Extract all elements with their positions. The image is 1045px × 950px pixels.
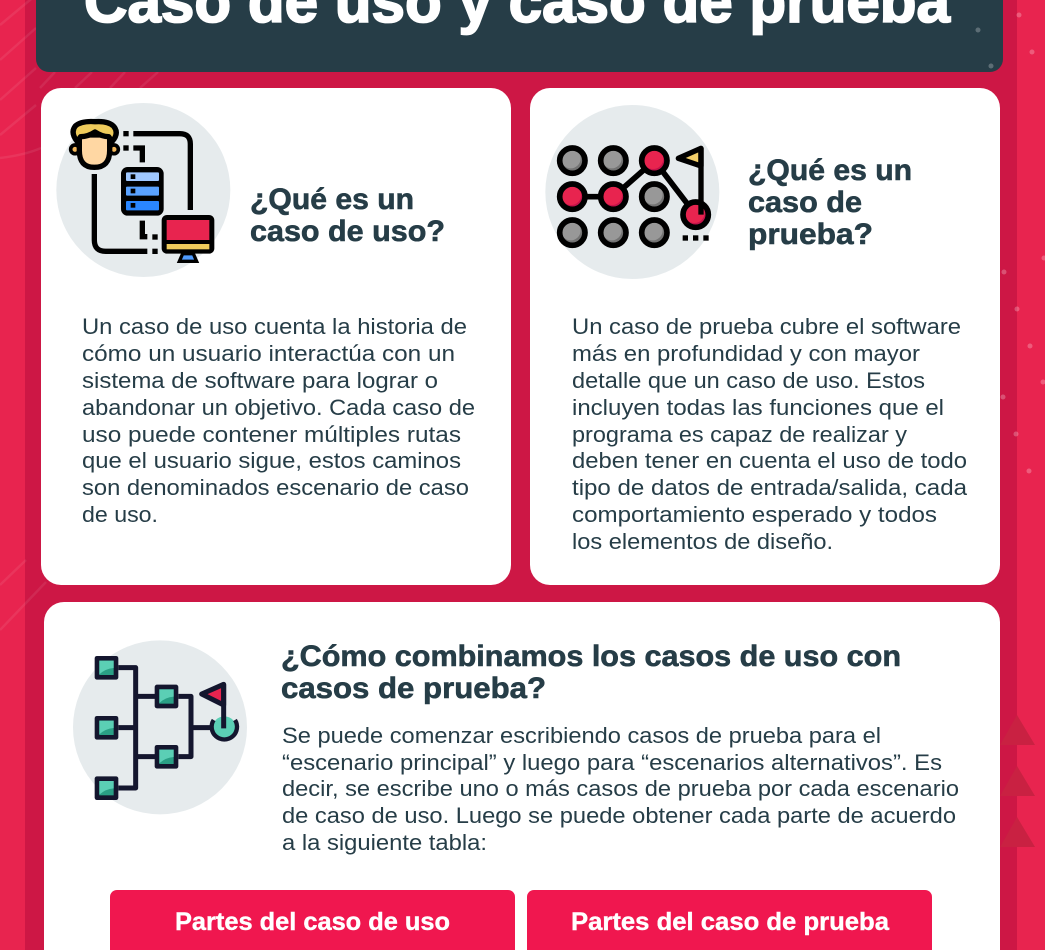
panel: combining use cases and test cases: [44, 602, 1000, 950]
text block: tipo de datos de entrada/salida, cada: [572, 475, 968, 500]
text block: [82, 314, 475, 527]
text block: sistema de software para lograr o: [82, 368, 438, 393]
panel: test case: [530, 88, 1000, 585]
icon: tree diagram with flag: [73, 640, 247, 814]
text block: detalle que un caso de uso. Estos: [572, 368, 925, 393]
text block: decir, se escribe uno o más casos de prueba por cada escenario: [282, 776, 959, 801]
heading: prueba?: [748, 218, 873, 251]
heading: casos de prueba?: [281, 672, 546, 705]
text block: abandonar un objetivo. Cada caso de: [82, 395, 475, 420]
table header: test case parts: Partes del caso de prueba: [571, 908, 890, 936]
heading: [281, 640, 901, 705]
text block: Un caso de uso cuenta la historia de: [82, 314, 467, 339]
decorative triangles: [1000, 715, 1035, 847]
heading: ¿Qué es un: [748, 154, 912, 187]
heading: ¿Cómo combinamos los casos de uso con: [281, 640, 901, 673]
text block: deben tener en cuenta el uso de todo: [572, 448, 967, 473]
text block: incluyen todas las funciones que el: [572, 395, 944, 420]
text block: “escenario principal” y luego para “escenarios alternativos”. Es: [282, 750, 942, 775]
text block: más en profundidad y con mayor: [572, 341, 921, 366]
text block: los elementos de diseño.: [572, 529, 833, 554]
icon: path through nodes with flag: [545, 105, 719, 279]
text block: de caso de uso. Luego se puede obtener cada parte de acuerdo: [282, 803, 956, 828]
heading: [250, 183, 445, 248]
text block: uso puede contener múltiples rutas: [82, 422, 461, 447]
text block: Un caso de prueba cubre el software: [572, 314, 961, 339]
table header: use case parts: Partes del caso de uso: [175, 908, 450, 936]
table header: test case parts: [527, 890, 932, 950]
text block: a la siguiente tabla:: [282, 830, 487, 855]
heading: caso de uso?: [250, 215, 445, 248]
text block: Se puede comenzar escribiendo casos de prueba para el: [282, 723, 881, 748]
text block: son denominados escenario de caso: [82, 475, 469, 500]
text block: de uso.: [82, 502, 158, 527]
text block: cómo un usuario interactúa con un: [82, 341, 455, 366]
text block: comportamiento esperado y todos: [572, 502, 937, 527]
heading: ¿Qué es un: [250, 183, 414, 216]
text block: que el usuario sigue, estos caminos: [82, 448, 461, 473]
table header: use case parts: [110, 890, 515, 950]
text block: programa es capaz de realizar y: [572, 422, 908, 447]
heading: [748, 154, 912, 251]
heading: caso de: [748, 186, 862, 219]
text block: [572, 314, 968, 554]
panel: use case: [41, 88, 511, 585]
header banner: [36, 0, 1003, 72]
icon: user, server and monitor: [56, 103, 230, 277]
text block: [282, 723, 959, 855]
